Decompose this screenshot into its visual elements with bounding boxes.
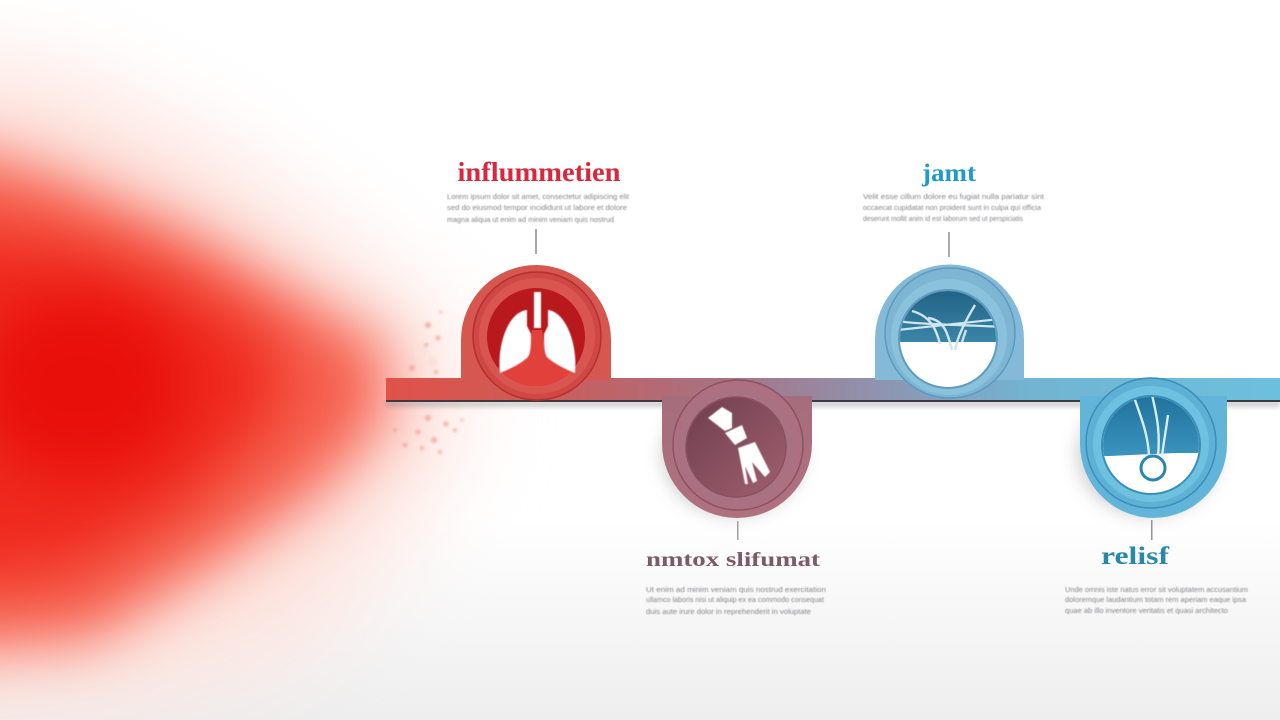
- description: motor stiffness: ullamco laboris nisi ut aliquip ex ea commodo consequat: [646, 595, 825, 604]
- step 3: joint: [863, 160, 1045, 398]
- icon: joint badge: [661, 380, 812, 518]
- description: relief: quae ab illo inventore veritatis et quasi architecto: [1065, 606, 1228, 615]
- description: inflammation: magna aliqua ut enim ad minim veniam quis nostrud: [447, 215, 614, 224]
- connector line: [737, 521, 738, 540]
- step 4: relief: [1065, 378, 1248, 615]
- icon: lungs badge: [461, 265, 611, 400]
- description: joint: occaecat cupidatat non proident sunt in culpa qui officia: [863, 203, 1042, 212]
- connector line: [948, 232, 950, 257]
- description: motor stiffness: duis aute irure dolor in reprehenderit in voluptate: [646, 607, 811, 616]
- icon: joint cross-section badge: [875, 264, 1024, 398]
- description: inflammation: sed do eiusmod tempor incididunt ut labore et dolore: [447, 203, 627, 212]
- title: inflammation: inflummetien: [458, 157, 620, 187]
- description: motor stiffness: [646, 585, 826, 616]
- description: inflammation: Lorem ipsum dolor sit amet, consectetur adipiscing elit: [447, 192, 630, 201]
- title: relief: relisf: [1101, 543, 1170, 570]
- description: relief: [1065, 585, 1248, 615]
- description: motor stiffness: Ut enim ad minim veniam quis nostrud exercitation: [646, 585, 826, 594]
- red powder cloud: [0, 50, 460, 720]
- title: joint: jamt: [921, 160, 977, 187]
- timeline bar: [386, 378, 1280, 407]
- description: joint: [863, 192, 1045, 223]
- connector line: [535, 229, 537, 254]
- description: relief: doloremque laudantium totam rem aperiam eaque ipsa: [1065, 595, 1247, 604]
- description: relief: Unde omnis iste natus error sit voluptatem accusantium: [1065, 585, 1248, 594]
- icon: hair follicle badge: [1076, 378, 1227, 518]
- title: motor stiffness: nmtox slifumat: [646, 549, 820, 571]
- powder speckles: [393, 310, 464, 454]
- description: joint: deserunt mollit anim id est laborum sed ut perspiciatis: [863, 214, 1023, 223]
- step 2: motor stiffness: [646, 380, 826, 616]
- lungs: [500, 292, 575, 373]
- connector line: [1151, 520, 1152, 540]
- bone segments: [708, 407, 770, 484]
- description: inflammation: [447, 192, 630, 224]
- description: joint: Velit esse cillum dolore eu fugiat nulla pariatur sint: [863, 192, 1045, 201]
- step 1: inflammation: [447, 157, 630, 400]
